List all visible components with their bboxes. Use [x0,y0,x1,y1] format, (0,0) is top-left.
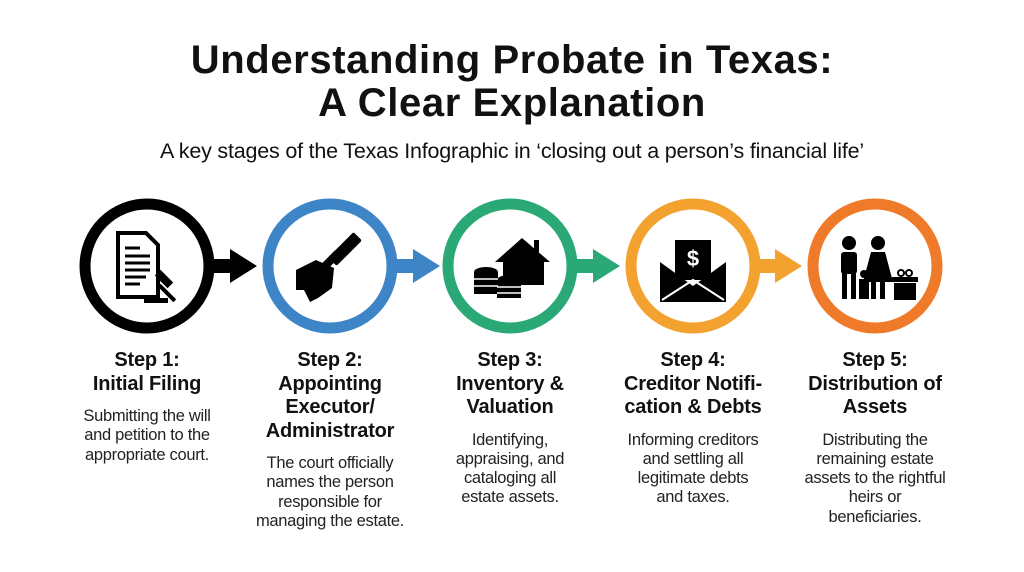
step 3: Identifying, [472,430,548,448]
step 5 [804,349,946,526]
icon: house coins [474,238,550,298]
step 1: appropriate court. [85,446,209,464]
step 5: assets to the rightful [804,469,946,487]
icon: document gavel [118,233,176,303]
step 2: Executor/ [285,396,375,418]
title: Understanding Probate in Texas: [191,38,833,82]
title: A Clear Explanation [318,81,706,125]
step 4: Informing creditors [628,430,758,448]
step 5: beneficiaries. [828,508,922,526]
step 2: Administrator [266,420,394,442]
step 1: and petition to the [84,426,210,444]
step 1: Initial Filing [93,372,201,394]
step 3: Valuation [466,396,554,418]
arrow 4 [757,249,802,283]
step 4: and taxes. [656,488,730,506]
arrow 1 [212,249,257,283]
icon: hand holding gavel [296,232,362,302]
title [191,38,833,125]
step 3: estate assets. [461,488,559,506]
step 4: legitimate debts [638,469,748,487]
step 1: Submitting the will [83,407,211,425]
step 2: Appointing [278,372,382,394]
step 4: and settling all [643,450,743,468]
step 3: cataloging all [464,469,556,487]
step 3 [456,349,564,506]
step 3: Step 3: [477,349,543,371]
step 2: The court officially [267,454,393,472]
icon: family gift [841,236,918,300]
step 2: names the person [266,473,394,491]
step 2: Step 2: [297,349,363,371]
step 3: Inventory & [456,372,564,394]
arrow 3 [575,249,620,283]
step 4: cation & Debts [624,396,762,418]
step 2: responsible for [278,493,382,511]
step 3: appraising, and [456,450,564,468]
step 4 [624,349,762,506]
step 5: heirs or [849,488,901,506]
circle 5 [813,204,937,328]
arrow 2 [395,249,440,283]
icon: envelope dollar: $ [687,246,699,271]
circle 4 [631,204,755,328]
step 5: Distribution of [808,372,942,394]
circle 2 [268,204,392,328]
step 5: Distributing the [822,430,928,448]
subtitle: A key stages of the Texas Infographic in ‘closing out a person’s financial life’ [160,139,864,163]
circle 3 [448,204,572,328]
step 2: managing the estate. [256,512,404,530]
step 2 [256,349,404,530]
circle 1 [85,204,209,328]
step 5: Assets [843,396,907,418]
step 4: Creditor Notifi- [624,372,762,394]
step 5: Step 5: [842,349,908,371]
step 1: Step 1: [114,349,180,371]
step 5: remaining estate [816,450,934,468]
step 4: Step 4: [660,349,726,371]
step 1 [83,349,211,464]
